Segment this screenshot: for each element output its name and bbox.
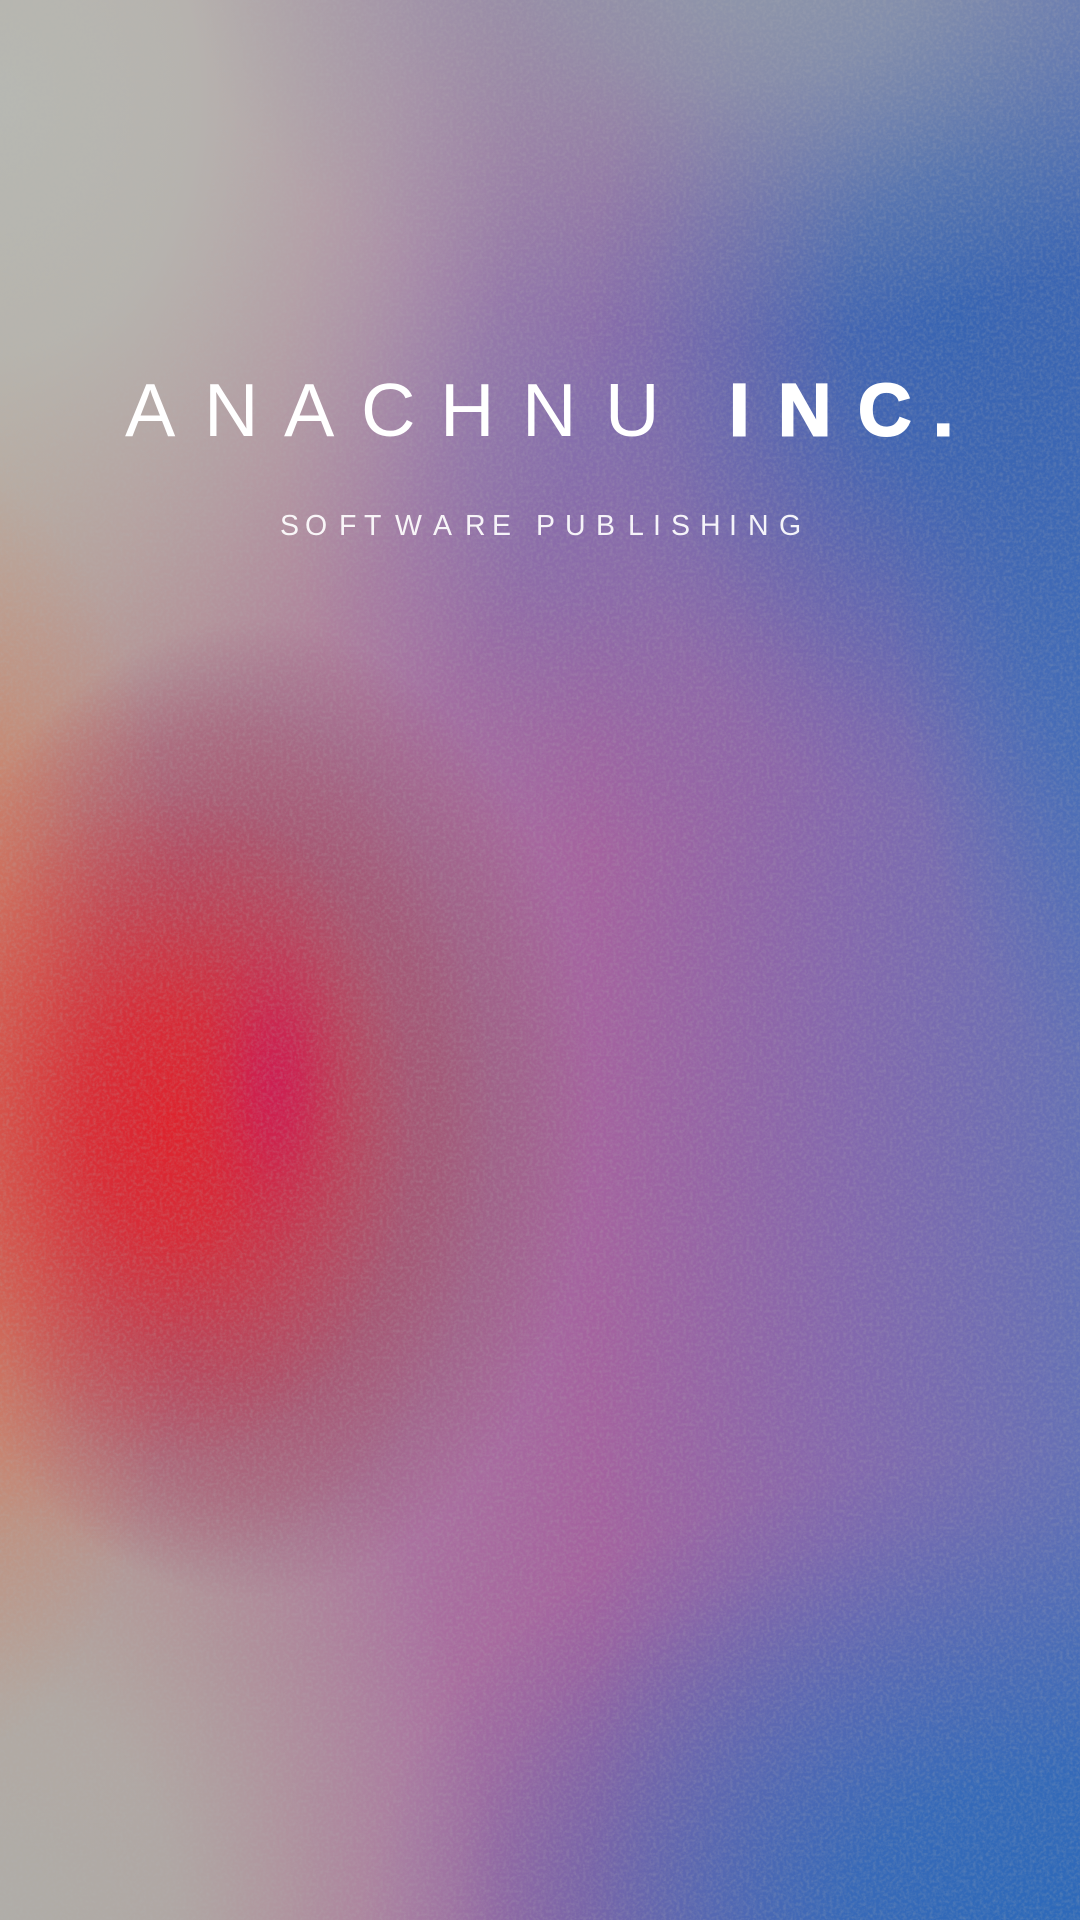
title: [125, 368, 954, 452]
subtitle: SOFTWARE PUBLISHING: [280, 510, 801, 542]
title: INC.: [729, 368, 954, 452]
title: ANACHNU: [125, 368, 660, 452]
